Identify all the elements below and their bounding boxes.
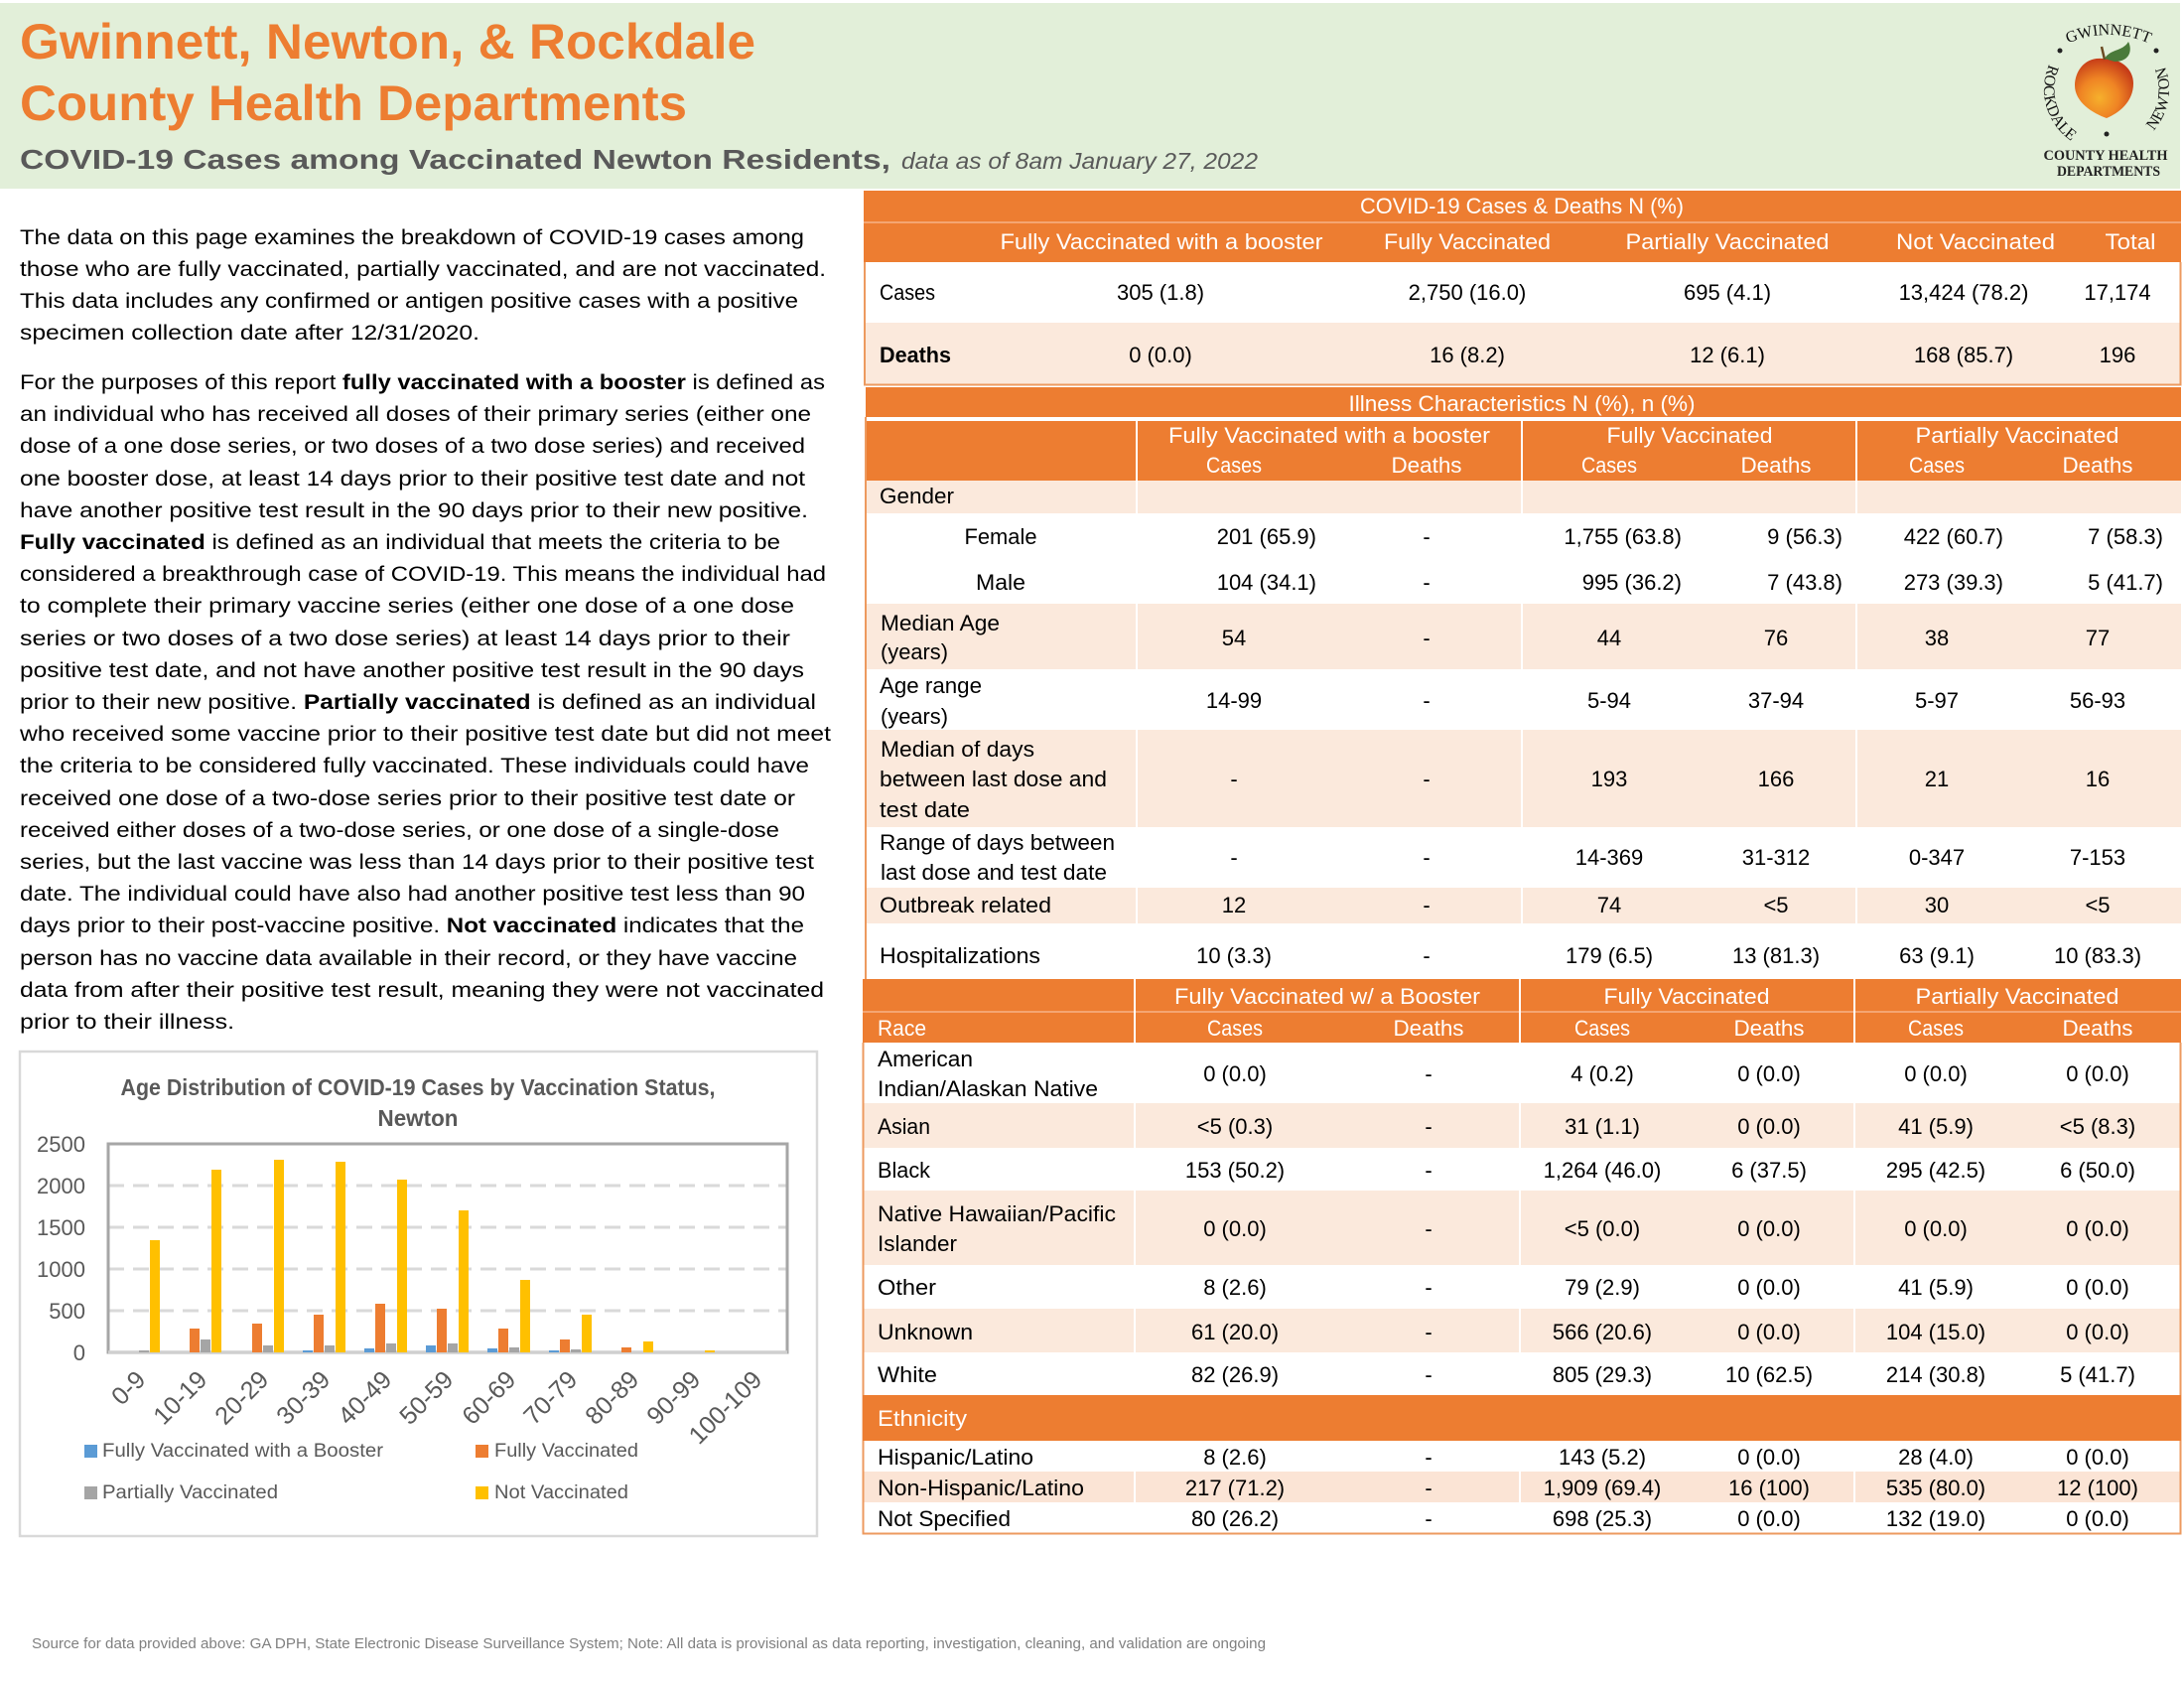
row: male: 104 (34.1) <box>1217 570 1316 595</box>
chart legend: Fully Vaccinated with a Booster <box>102 1441 384 1462</box>
row: other: 0 (0.0) <box>1737 1275 1801 1300</box>
row: cases: 2,750 (16.0) <box>1409 280 1526 305</box>
row: american indian: 0 (0.0) <box>1904 1061 1968 1086</box>
row: other: 8 (2.6) <box>1203 1275 1267 1300</box>
row: not specified: Not Specified <box>878 1506 1011 1531</box>
row: hispanic: 8 (2.6) <box>1203 1445 1267 1470</box>
chart legend: Partially Vaccinated <box>102 1482 278 1503</box>
column headers: Cases <box>1574 1016 1630 1041</box>
y axis labels <box>37 1132 85 1365</box>
row: deaths: 168 (85.7) <box>1914 343 2013 367</box>
y axis labels: 500 <box>49 1299 85 1324</box>
row: black: 6 (50.0) <box>2060 1158 2135 1183</box>
row: asian: <5 (0.3) <box>1197 1114 1273 1139</box>
row: female: 9 (56.3) <box>1767 524 1843 549</box>
row: outbreak related: <5 <box>1763 893 1789 917</box>
row: black: 6 (37.5) <box>1731 1158 1807 1183</box>
row: hospitalizations: - <box>1423 943 1431 968</box>
row: outbreak related: 74 <box>1597 893 1621 917</box>
column headers <box>1001 229 2156 254</box>
row: range of days: - <box>1230 845 1238 870</box>
column headers: Fully Vaccinated <box>1604 984 1769 1009</box>
row: hispanic: 0 (0.0) <box>2066 1445 2129 1470</box>
row: native hawaiian: 0 (0.0) <box>1904 1216 1968 1241</box>
text block: definitions: have another positive test result in the 90 days prior to their new positive. <box>20 498 808 522</box>
row: unknown <box>878 1320 2129 1344</box>
logo: peach emblem: COUNTY HEALTH <box>2043 148 2168 164</box>
text block: definitions: days prior to their post-vaccine positive. Not vaccinated indicates that the <box>20 914 804 937</box>
row: deaths: 0 (0.0) <box>1129 343 1192 367</box>
column headers: Partially Vaccinated <box>1916 423 2118 448</box>
y axis labels: 2000 <box>37 1174 85 1198</box>
row: median days <box>880 737 2110 822</box>
row: black <box>878 1158 2135 1183</box>
row: cases: 13,424 (78.2) <box>1899 280 2028 305</box>
column headers: Not Vaccinated <box>1896 229 2055 254</box>
x axis labels: 50-59 <box>394 1365 459 1430</box>
row: outbreak related: 12 <box>1222 893 1246 917</box>
column headers: Cases <box>1581 453 1637 478</box>
subtitle <box>20 144 1258 175</box>
row: male: 995 (36.2) <box>1582 570 1682 595</box>
header band <box>0 3 2180 189</box>
column headers: Fully Vaccinated with a booster <box>1001 229 1322 254</box>
row: female: Female <box>965 524 1036 549</box>
row: native hawaiian: 0 (0.0) <box>1737 1216 1801 1241</box>
row: not specified: - <box>1425 1506 1433 1531</box>
x axis labels: 90-99 <box>641 1365 706 1430</box>
text block: definitions: positive test date, and not have another positive test result in the 90 days <box>20 658 804 682</box>
text block: definitions: date. The individual could have also had another positive test less than 90 <box>20 882 805 906</box>
row: female <box>965 524 2163 549</box>
text block: definitions: prior to their illness. <box>20 1010 234 1034</box>
row: unknown: Unknown <box>878 1320 973 1344</box>
subtitle: COVID-19 Cases among Vaccinated Newton Residents, <box>20 144 890 175</box>
row: male: - <box>1423 570 1431 595</box>
x axis labels: 40-49 <box>333 1365 397 1430</box>
row: asian: - <box>1425 1114 1433 1139</box>
row: not specified: 80 (26.2) <box>1191 1506 1279 1531</box>
row: hospitalizations: 179 (6.5) <box>1566 943 1653 968</box>
text block: definitions: dose of a one dose series, or two doses of a two dose series) and received <box>20 434 805 458</box>
logo: peach emblem: DEPARTMENTS <box>2057 164 2160 180</box>
column headers: Fully Vaccinated <box>1384 229 1551 254</box>
row: white: 805 (29.3) <box>1553 1362 1652 1387</box>
row: median days: - <box>1423 767 1431 791</box>
row: asian: 31 (1.1) <box>1565 1114 1640 1139</box>
row: male: Male <box>976 570 1025 595</box>
row: deaths: Deaths <box>880 343 951 367</box>
row: non-hispanic <box>878 1476 2138 1500</box>
row: deaths <box>880 343 2135 367</box>
row: range of days: 0-347 <box>1909 845 1965 870</box>
text block: definitions: series, but the last vaccine was less than 14 days prior to their positive test <box>20 850 814 874</box>
bars: fully vaccinated with a booster <box>303 1345 559 1352</box>
row: median days: 21 <box>1925 767 1949 791</box>
bars: not vaccinated <box>150 1160 715 1352</box>
row: age range: 56-93 <box>2070 688 2125 713</box>
row: range of days: 31-312 <box>1742 845 1810 870</box>
row: non-hispanic: 535 (80.0) <box>1886 1476 1985 1500</box>
row: female: - <box>1423 524 1431 549</box>
row: non-hispanic: Non-Hispanic/Latino <box>878 1476 1084 1500</box>
title: Gwinnett, Newton, & Rockdale <box>20 14 755 70</box>
row: range of days: last dose and test date <box>881 860 1107 885</box>
column headers: Cases <box>1206 453 1262 478</box>
row: asian: 41 (5.9) <box>1898 1114 1974 1139</box>
row: white: 5 (41.7) <box>2060 1362 2135 1387</box>
row: median age: 76 <box>1764 626 1788 650</box>
column headers: Deaths <box>1392 453 1461 478</box>
column headers: Partially Vaccinated <box>1626 229 1829 254</box>
row: outbreak related: - <box>1423 893 1431 917</box>
row: male: 5 (41.7) <box>2088 570 2163 595</box>
row: range of days: 14-369 <box>1575 845 1643 870</box>
row: cases: Cases <box>880 280 935 305</box>
text block: definitions: data from after their positive test result, meaning they were not vaccinated <box>20 978 824 1002</box>
row: other: - <box>1425 1275 1433 1300</box>
bars: fully vaccinated <box>190 1304 631 1352</box>
row: native hawaiian: <5 (0.0) <box>1565 1216 1640 1241</box>
row: american indian: 0 (0.0) <box>1203 1061 1267 1086</box>
row: range of days <box>880 830 2125 885</box>
chart title <box>121 1074 715 1131</box>
x axis labels: 60-69 <box>457 1365 521 1430</box>
row: native hawaiian: 0 (0.0) <box>1203 1216 1267 1241</box>
row: other: 79 (2.9) <box>1565 1275 1640 1300</box>
text block: definitions <box>19 370 831 1034</box>
text block: definitions: considered a breakthrough case of COVID-19. This means the individual had <box>20 562 826 586</box>
column headers: Race <box>878 1016 926 1041</box>
row: native hawaiian: Native Hawaiian/Pacific <box>878 1201 1116 1226</box>
row: hispanic: - <box>1425 1445 1433 1470</box>
column headers: Deaths <box>1394 1016 1463 1041</box>
column headers: Deaths <box>2063 453 2132 478</box>
row: american indian: American <box>878 1047 973 1071</box>
row: median days: 193 <box>1591 767 1627 791</box>
row: age range: 5-97 <box>1915 688 1959 713</box>
row: non-hispanic: - <box>1425 1476 1433 1500</box>
chart legend <box>84 1441 638 1503</box>
text block: definitions: one booster dose, at least 14 days prior to their positive test date and not <box>20 467 805 491</box>
row: white: 10 (62.5) <box>1725 1362 1813 1387</box>
row: not specified: 132 (19.0) <box>1886 1506 1985 1531</box>
column headers: Cases <box>1908 1016 1964 1041</box>
row: female: 201 (65.9) <box>1217 524 1316 549</box>
text block: introduction: those who are fully vaccinated, partially vaccinated, and are not vaccinated. <box>20 257 826 281</box>
text block: introduction: specimen collection date after 12/31/2020. <box>20 321 479 345</box>
chart title: Newton <box>377 1105 459 1131</box>
row: male: 273 (39.3) <box>1904 570 2003 595</box>
row: white: 214 (30.8) <box>1886 1362 1985 1387</box>
row: age range: (years) <box>881 704 948 729</box>
ethnicity band: Ethnicity <box>878 1406 967 1431</box>
text block: definitions: Fully vaccinated is defined as an individual that meets the criteria to be <box>20 530 780 554</box>
row: male <box>976 570 2163 595</box>
bars: partially vaccinated <box>139 1339 581 1352</box>
row: black: - <box>1425 1158 1433 1183</box>
chart legend: Fully Vaccinated <box>494 1441 638 1462</box>
row: median age: - <box>1423 626 1431 650</box>
x axis labels: 70-79 <box>518 1365 583 1430</box>
row: deaths: 12 (6.1) <box>1690 343 1765 367</box>
x axis labels: 0-9 <box>106 1365 151 1411</box>
y axis labels: 0 <box>73 1340 85 1365</box>
row: other: Other <box>878 1275 936 1300</box>
text block: definitions: received either doses of a two-dose series, or one dose of a single-dose <box>20 818 779 842</box>
x axis labels: 80-89 <box>580 1365 644 1430</box>
row: american indian: Indian/Alaskan Native <box>878 1076 1098 1101</box>
row: age range <box>880 673 2125 729</box>
x axis labels <box>106 1365 767 1450</box>
row: white: White <box>878 1362 937 1387</box>
row: black: 295 (42.5) <box>1886 1158 1985 1183</box>
row: unknown: 566 (20.6) <box>1553 1320 1652 1344</box>
chart title: Age Distribution of COVID-19 Cases by Vaccination Status, <box>121 1074 715 1100</box>
title: County Health Departments <box>20 75 687 131</box>
text block: definitions: who received some vaccine prior to their positive test date but did not meet <box>19 722 831 746</box>
row: hospitalizations: 63 (9.1) <box>1899 943 1975 968</box>
row: outbreak related: <5 <box>2085 893 2111 917</box>
logo: peach emblem <box>2043 24 2169 180</box>
row: range of days: 7-153 <box>2070 845 2125 870</box>
row: median age: 77 <box>2086 626 2110 650</box>
row: native hawaiian: - <box>1425 1216 1433 1241</box>
row: age range: 37-94 <box>1748 688 1804 713</box>
row: asian: Asian <box>878 1114 930 1139</box>
x axis labels: 10-19 <box>148 1365 212 1430</box>
text block: definitions: received one dose of a two-dose series prior to their positive test date or <box>20 786 795 810</box>
row: not specified: 0 (0.0) <box>1737 1506 1801 1531</box>
chart legend: Not Vaccinated <box>494 1482 628 1503</box>
row: unknown: 0 (0.0) <box>2066 1320 2129 1344</box>
row: hispanic: 28 (4.0) <box>1898 1445 1974 1470</box>
logo: peach emblem: NEWTON <box>2145 68 2169 131</box>
row: deaths: 16 (8.2) <box>1430 343 1505 367</box>
gridlines and plot frame <box>108 1144 787 1352</box>
row: age range: - <box>1423 688 1431 713</box>
row: hospitalizations: 13 (81.3) <box>1732 943 1820 968</box>
row: unknown: 61 (20.0) <box>1191 1320 1279 1344</box>
row: median age <box>881 611 2110 664</box>
x axis labels: 30-39 <box>271 1365 336 1430</box>
row: american indian: 0 (0.0) <box>1737 1061 1801 1086</box>
row: non-hispanic: 12 (100) <box>2057 1476 2138 1500</box>
row: median age: 44 <box>1597 626 1621 650</box>
column headers: Cases <box>1207 1016 1263 1041</box>
row: hispanic: 0 (0.0) <box>1737 1445 1801 1470</box>
row: median days: between last dose and <box>880 767 1107 791</box>
source note: Source for data provided above: GA DPH, State Electronic Disease Surveillance System; Note: All data is provisional as data reporting, investigation, cleaning, and validation are ongoing <box>32 1635 1266 1652</box>
row: outbreak related: 30 <box>1925 893 1949 917</box>
panel: age distribution bar chart <box>20 1052 817 1536</box>
row: white <box>878 1362 2135 1387</box>
row: cases: 305 (1.8) <box>1117 280 1204 305</box>
row: other <box>878 1275 2129 1300</box>
column headers <box>878 984 2132 1041</box>
row: hispanic: 143 (5.2) <box>1559 1445 1646 1470</box>
logo: peach emblem: ROCKDALE <box>2043 65 2077 141</box>
logo: peach emblem: GWINNETT <box>2066 24 2152 43</box>
text block: definitions: an individual who has received all doses of their primary series (either one <box>20 402 811 426</box>
row: age range: Age range <box>880 673 982 698</box>
row: female: 1,755 (63.8) <box>1564 524 1682 549</box>
row: age range: 5-94 <box>1587 688 1631 713</box>
row: median age: Median Age <box>881 611 1000 635</box>
text block: definitions: prior to their new positive. Partially vaccinated is defined as an individual <box>20 690 816 714</box>
row: other: 41 (5.9) <box>1898 1275 1974 1300</box>
row: american indian: 0 (0.0) <box>2066 1061 2129 1086</box>
row: native hawaiian: 0 (0.0) <box>2066 1216 2129 1241</box>
column headers <box>1168 423 2132 478</box>
row: range of days: Range of days between <box>880 830 1115 855</box>
table title: COVID-19 Cases & Deaths N (%) <box>1360 194 1684 218</box>
y axis labels: 2500 <box>37 1132 85 1157</box>
column headers: Fully Vaccinated with a booster <box>1168 423 1490 448</box>
row: median age: (years) <box>881 639 948 664</box>
column headers: Cases <box>1909 453 1965 478</box>
row: median days: 16 <box>2086 767 2110 791</box>
row: not specified: 0 (0.0) <box>2066 1506 2129 1531</box>
text block: definitions: person has no vaccine data available in their record, or they have vaccine <box>20 946 797 970</box>
row: black: Black <box>878 1158 931 1183</box>
text block: introduction: The data on this page examines the breakdown of COVID-19 cases among <box>20 225 804 249</box>
row: cases: 695 (4.1) <box>1684 280 1771 305</box>
row: unknown: - <box>1425 1320 1433 1344</box>
row: hispanic <box>878 1445 2129 1470</box>
row: asian: <5 (8.3) <box>2060 1114 2135 1139</box>
row: non-hispanic: 217 (71.2) <box>1185 1476 1285 1500</box>
row: deaths: 196 <box>2100 343 2135 367</box>
y axis labels: 1000 <box>37 1257 85 1282</box>
row: outbreak related: Outbreak related <box>880 893 1051 917</box>
row: american indian <box>878 1047 2129 1101</box>
row: asian <box>878 1114 2135 1139</box>
row: median age: 54 <box>1222 626 1246 650</box>
ethnicity band <box>863 1395 2181 1441</box>
column headers: Partially Vaccinated <box>1916 984 2118 1009</box>
text block: definitions: to complete their primary vaccine series (either one dose of a one dose <box>20 594 794 618</box>
row: white: - <box>1425 1362 1433 1387</box>
text block: definitions: the criteria to be considered fully vaccinated. These individuals could have <box>20 754 809 777</box>
text block: definitions: For the purposes of this report fully vaccinated with a booster is defined as <box>20 370 825 394</box>
row: native hawaiian: Islander <box>878 1231 957 1256</box>
row: hospitalizations <box>880 943 2141 968</box>
row: median days: 166 <box>1758 767 1794 791</box>
row: female: 7 (58.3) <box>2088 524 2163 549</box>
row: hospitalizations: 10 (83.3) <box>2054 943 2141 968</box>
text block: definitions: series or two doses of a two dose series) at least 14 days prior to their <box>20 627 790 650</box>
row: median days: Median of days <box>881 737 1034 762</box>
row: median age: 38 <box>1925 626 1949 650</box>
subtitle: data as of 8am January 27, 2022 <box>901 148 1258 174</box>
row: gender: Gender <box>880 484 954 508</box>
column headers: Deaths <box>1733 1016 1805 1041</box>
row: unknown: 0 (0.0) <box>1737 1320 1801 1344</box>
row: cases: 17,174 <box>2084 280 2151 305</box>
column headers: Fully Vaccinated <box>1606 423 1773 448</box>
row: american indian: 4 (0.2) <box>1570 1061 1634 1086</box>
row: outbreak related <box>880 893 2111 917</box>
row: black: 1,264 (46.0) <box>1544 1158 1661 1183</box>
row: range of days: - <box>1423 845 1431 870</box>
row: female: 422 (60.7) <box>1904 524 2003 549</box>
row: white: 82 (26.9) <box>1191 1362 1279 1387</box>
table title: Illness Characteristics N (%), n (%) <box>1348 391 1696 416</box>
text block: introduction <box>20 225 826 345</box>
text block: introduction: This data includes any confirmed or antigen positive cases with a positive <box>20 289 798 313</box>
row: non-hispanic: 1,909 (69.4) <box>1544 1476 1661 1500</box>
row: cases <box>880 280 2151 305</box>
row: unknown: 104 (15.0) <box>1886 1320 1985 1344</box>
row: asian: 0 (0.0) <box>1737 1114 1801 1139</box>
row: other: 0 (0.0) <box>2066 1275 2129 1300</box>
row: non-hispanic: 16 (100) <box>1728 1476 1810 1500</box>
row: not specified <box>878 1506 2129 1531</box>
table: illness characteristics <box>865 387 2181 979</box>
x axis labels: 20-29 <box>209 1365 274 1430</box>
row: american indian: - <box>1425 1061 1433 1086</box>
column headers: Total <box>2105 229 2156 254</box>
column headers: Fully Vaccinated w/ a Booster <box>1174 984 1480 1009</box>
y axis labels: 1500 <box>37 1215 85 1240</box>
row: not specified: 698 (25.3) <box>1553 1506 1652 1531</box>
row: hospitalizations: Hospitalizations <box>880 943 1040 968</box>
x axis labels: 100-109 <box>684 1365 767 1450</box>
row: hospitalizations: 10 (3.3) <box>1196 943 1272 968</box>
row: black: 153 (50.2) <box>1185 1158 1285 1183</box>
row: male: 7 (43.8) <box>1767 570 1843 595</box>
column headers: Deaths <box>2063 1016 2132 1041</box>
row: age range: 14-99 <box>1206 688 1262 713</box>
row: hispanic: Hispanic/Latino <box>878 1445 1033 1470</box>
title <box>20 14 755 131</box>
column headers: Deaths <box>1741 453 1811 478</box>
table: cases and deaths <box>864 191 2181 385</box>
row: native hawaiian <box>878 1201 2129 1256</box>
table: race and ethnicity <box>863 979 2181 1534</box>
row: median days: test date <box>880 797 970 822</box>
row: median days: - <box>1230 767 1238 791</box>
